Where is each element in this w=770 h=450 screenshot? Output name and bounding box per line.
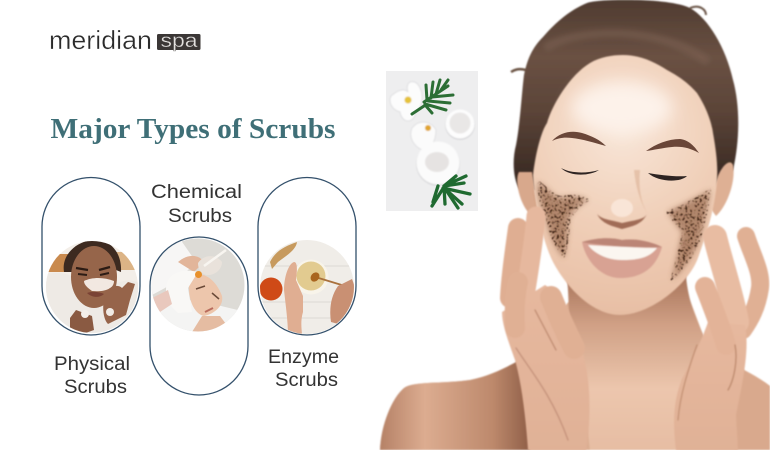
mouth [582,238,662,278]
face [533,55,717,315]
title: Major Types of Scrubs [50,114,336,145]
label: enzyme scrubs [268,347,339,391]
capsule outline: physical [42,178,140,335]
ears [517,162,734,216]
eye: left [561,168,599,175]
left hand [502,216,589,450]
label: physical scrubs: Physical [54,354,130,375]
coffee scrub: right cheek [666,188,711,282]
shoulders and neck [380,276,770,450]
capsule outline: enzyme [258,178,356,335]
hair [511,0,738,190]
right hand [674,236,760,450]
photo: spa products flat lay [386,71,478,211]
photo: honey and oat mixture [258,240,356,336]
panel: chemical scrubs [150,236,248,395]
label: physical scrubs [54,354,130,398]
photo: woman applying foam scrub [44,239,140,335]
label: enzyme scrubs: Scrubs [275,370,338,391]
nose [597,170,648,229]
photo: woman with coffee scrub on cheeks [380,0,770,450]
logo: meridian spa [49,25,200,55]
panel: enzyme scrubs [258,178,356,336]
eyebrow: right [646,139,699,153]
label: physical scrubs: Scrubs [64,377,127,398]
forehead highlight [572,82,672,134]
photo: chemical peel application [152,238,244,332]
logo: meridian spa: meridian [49,25,152,55]
label: enzyme scrubs: Enzyme [268,347,339,368]
label: chemical scrubs: Scrubs [168,206,232,227]
logo: meridian spa: spa [160,31,198,52]
eye: right [648,173,687,181]
eyebrow: left [552,132,606,146]
label: chemical scrubs [151,182,242,227]
panel: physical scrubs [42,178,140,335]
coffee scrub: left cheek [538,180,590,258]
label: chemical scrubs: Chemical [151,182,242,203]
capsule outline: chemical [150,237,248,395]
